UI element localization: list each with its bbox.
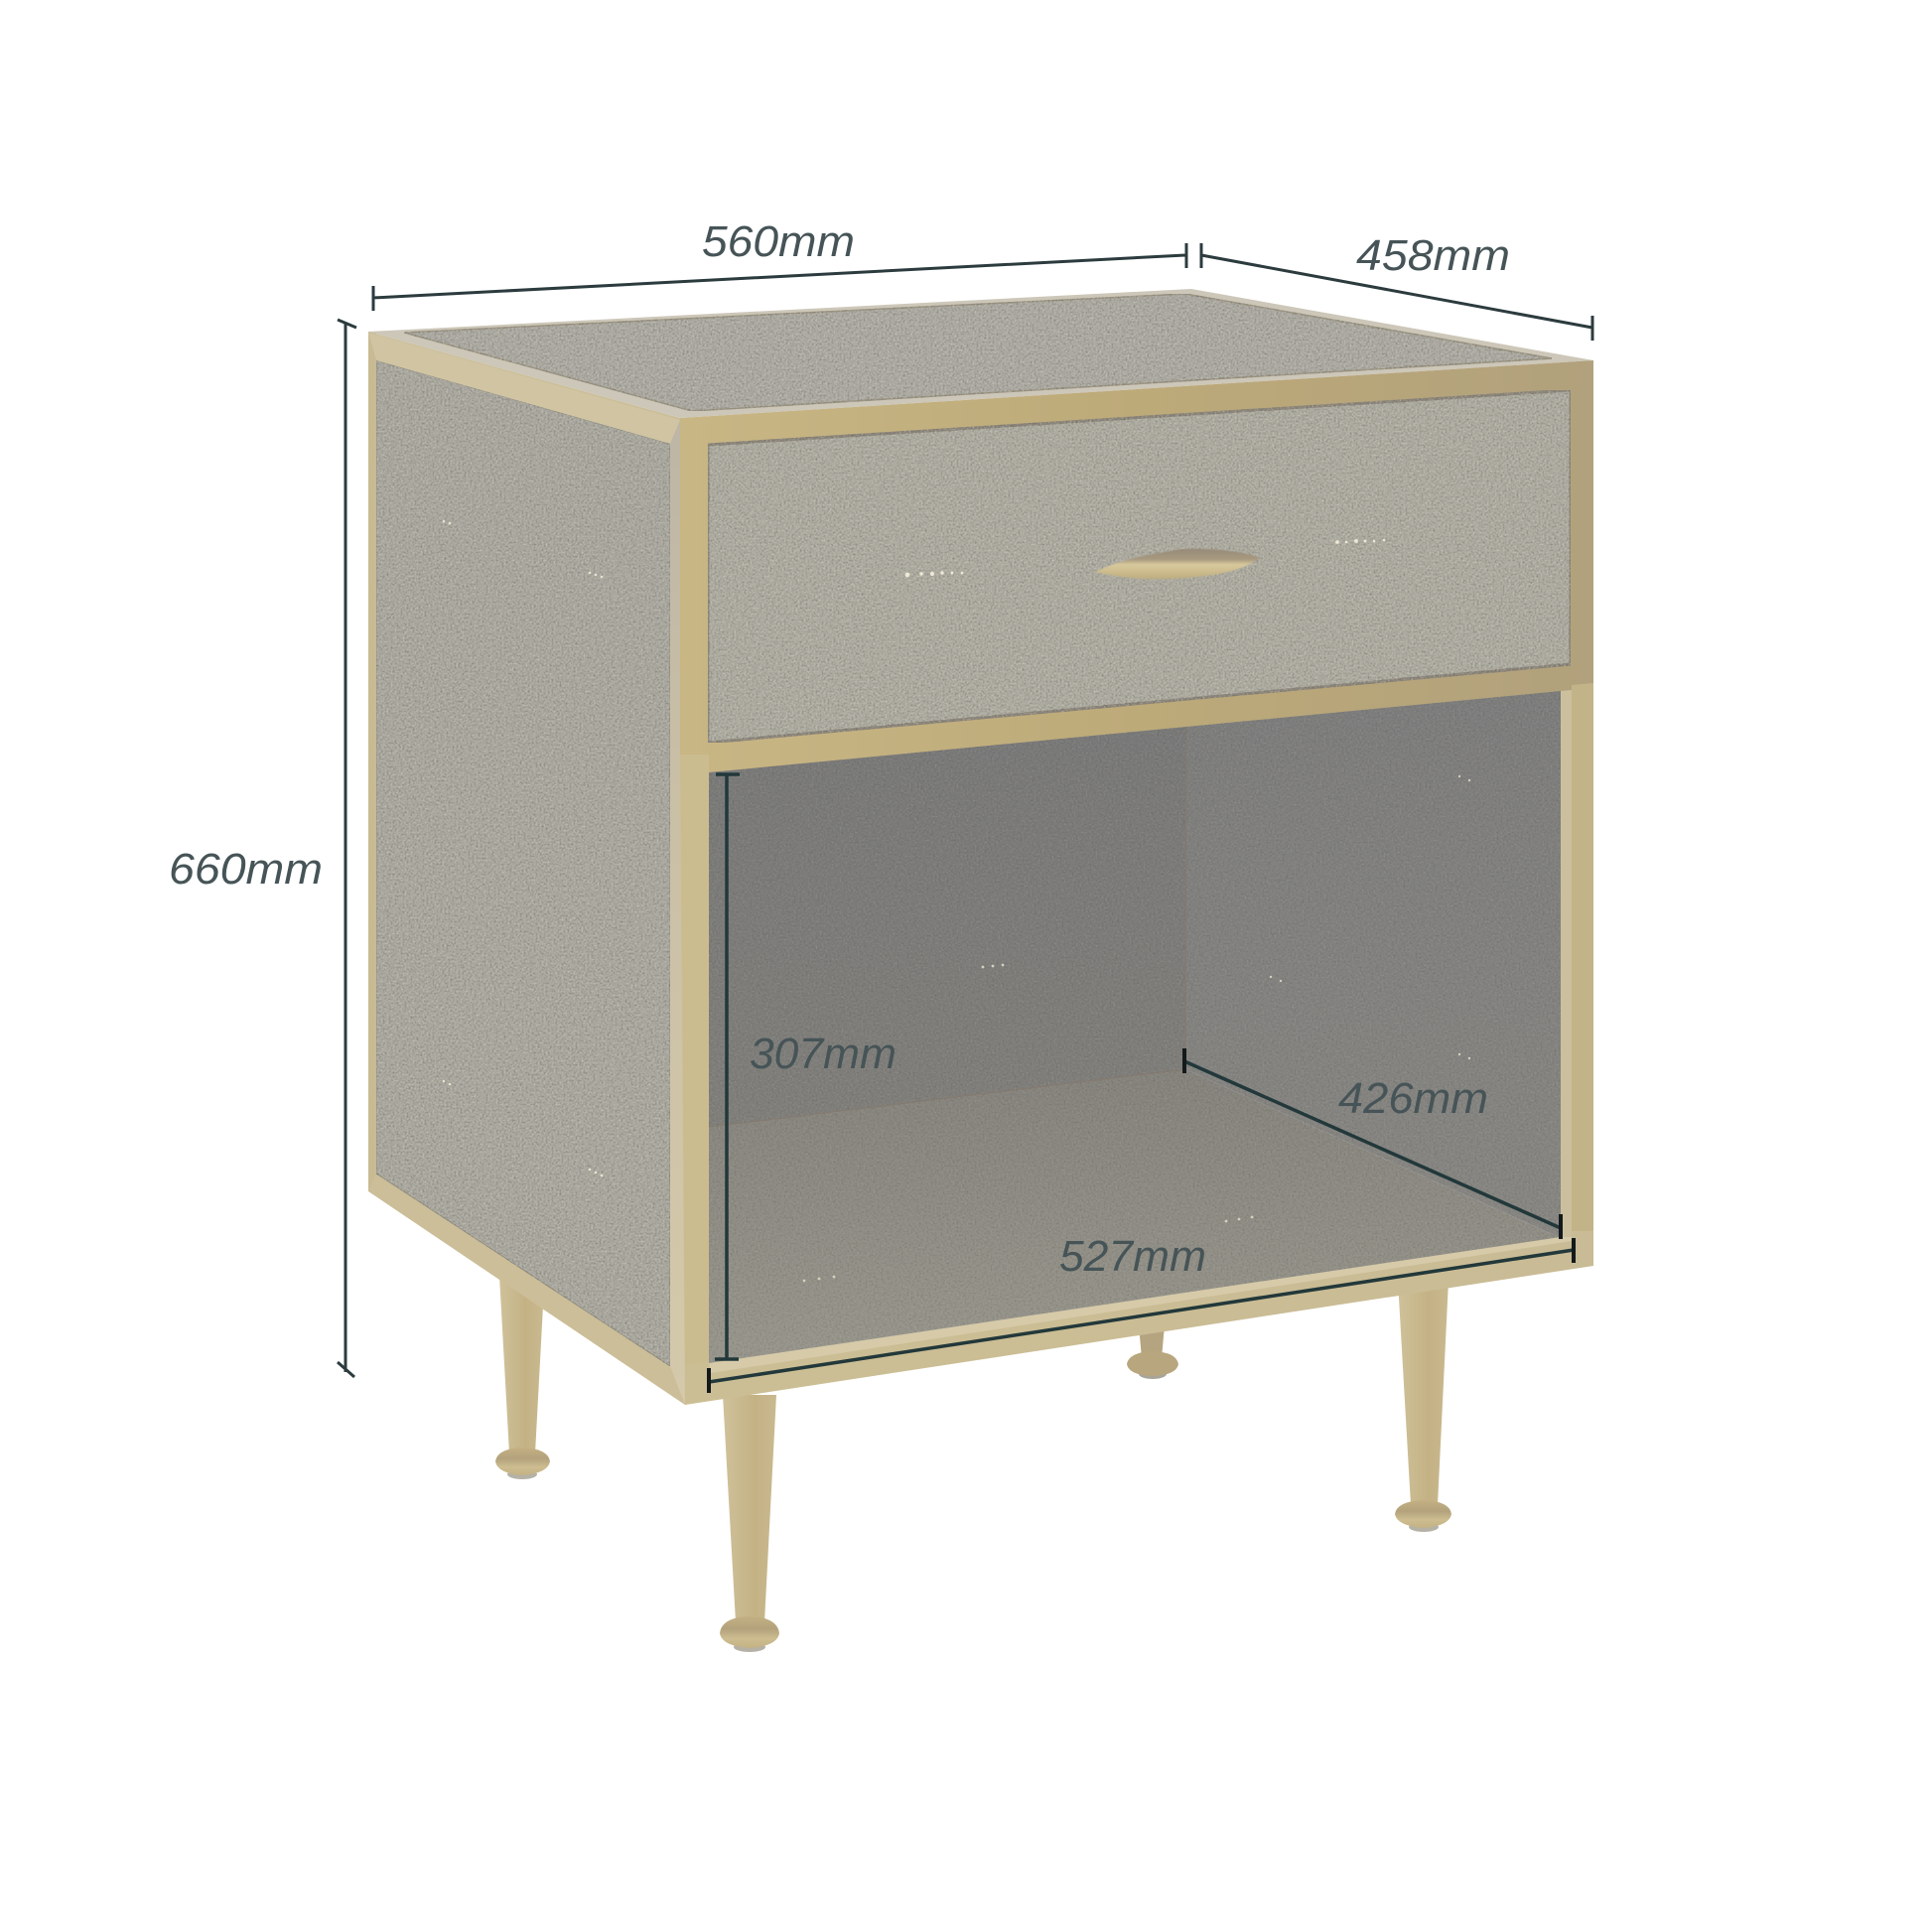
front frame (680, 360, 1593, 1405)
front lip (709, 1237, 1572, 1373)
dimension: 307mm inner height: 307mm (750, 1030, 897, 1078)
back right foot (1127, 1325, 1178, 1379)
wall seam (709, 727, 1186, 1127)
top face of the table (368, 289, 1593, 444)
dimension: 560mm width: 560mm (702, 217, 855, 266)
dimension: 527mm inner width (709, 1232, 1574, 1393)
dimension: 458mm depth (1201, 231, 1592, 341)
pearl dots (905, 539, 1385, 577)
right wall (1185, 691, 1561, 1238)
dimension: 560mm width (373, 217, 1186, 311)
side shagreen panel (376, 360, 670, 1366)
dimension: 660mm height (169, 320, 356, 1377)
dimension: 660mm height: 660mm (169, 845, 323, 894)
side face of the table (368, 332, 685, 1405)
open compartment (709, 690, 1572, 1373)
drawer handle (1095, 549, 1260, 579)
front left leg (720, 1395, 779, 1652)
dimension: 527mm inner width: 527mm (1059, 1232, 1206, 1281)
drawer front (708, 390, 1571, 743)
pearl dots inside (803, 775, 1470, 1282)
top shagreen panel (404, 294, 1552, 411)
floor (709, 1069, 1561, 1364)
dimension: 307mm inner height (715, 774, 897, 1359)
back wall (709, 727, 1186, 1127)
dimension: 426mm inner depth: 426mm (1338, 1074, 1488, 1123)
dimension: 458mm depth: 458mm (1356, 231, 1510, 280)
inner right strip (1561, 690, 1572, 1238)
dimension: 426mm inner depth (1184, 1048, 1561, 1239)
back left leg (495, 1276, 550, 1479)
front right leg (1395, 1281, 1451, 1532)
